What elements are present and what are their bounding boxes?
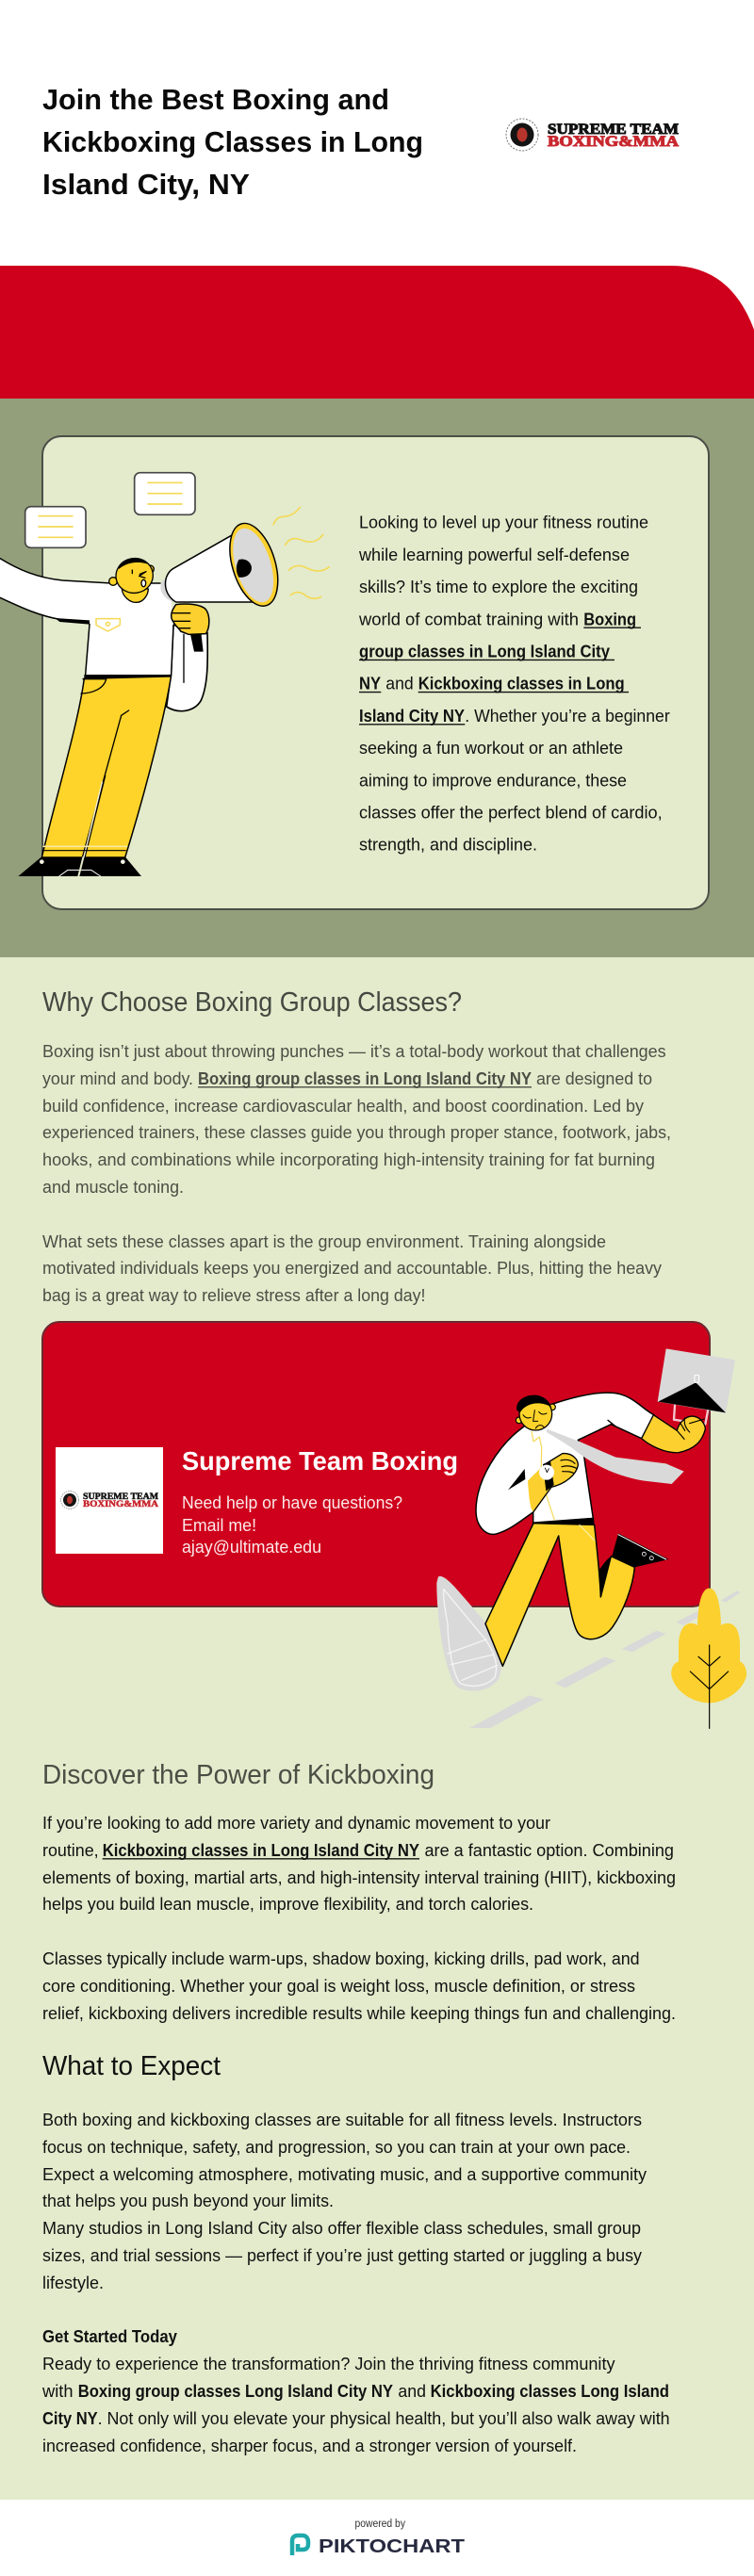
intro text block: skills? It’s time to explore the exciting: [359, 578, 638, 596]
text block: get started today: with: [41, 2382, 74, 2401]
intro text block: Boxing: [583, 610, 636, 628]
text block: kickboxing: Classes typically include warm-ups, shadow boxing, kicking drills, pad work, and: [42, 1949, 640, 1968]
text block: why choose: hooks, and combinations while incorporating high-intensity training for fat burning: [42, 1150, 655, 1169]
illustration: man with megaphone: [0, 473, 329, 876]
text block: kickboxing: elements of boxing, martial arts, and high-intensity interval training (HIIT), kickboxing: [42, 1868, 676, 1887]
title: Join the Best Boxing and: [42, 83, 389, 116]
logo: Supreme Team Boxing & MMA: BOXING&MMA: [548, 134, 680, 150]
text block: get started today: . Not only will you elevate your physical health, but you’ll also walk away with: [98, 2409, 670, 2428]
back shoe: [612, 1533, 668, 1567]
intro text block: [358, 514, 670, 855]
contact details: Email me!: [182, 1516, 256, 1535]
red banner with rounded corner: [0, 266, 754, 399]
logo: Supreme Team Boxing & MMA: [506, 119, 680, 151]
text block: what to expect: sizes, and trial sessions — perfect if you’re just getting started or juggling a busy: [42, 2246, 642, 2265]
text block: get started today: and: [398, 2382, 426, 2401]
intro text block: strength, and discipline.: [359, 836, 537, 855]
text block: why choose: motivated individuals keeps you energized and accountable. Plus, hitting the heavy: [42, 1259, 662, 1278]
icon: speech bubble top: [135, 473, 195, 514]
text block: why choose: bag is a great way to relieve stress after a long day!: [42, 1286, 426, 1305]
far sleeve: [167, 625, 207, 711]
text block: get started today: Get Started Today: [42, 2327, 177, 2346]
heading: why choose: Why Choose Boxing Group Classes?: [42, 987, 462, 1018]
head: [516, 1395, 555, 1430]
text block: get started today: Ready to experience the transformation? Join the thriving fitness community: [42, 2355, 615, 2373]
tree: [671, 1589, 746, 1728]
contact details: ajay@ultimate.edu: [182, 1538, 321, 1557]
intro text block: . Whether you’re a beginner: [465, 707, 670, 726]
sound waves: [273, 507, 329, 598]
text block: kickboxing: routine,: [42, 1841, 99, 1860]
intro text block: aiming to improve endurance, these: [359, 771, 627, 790]
text block: what to expect: focus on technique, safety, and progression, so you can train at your own pace.: [42, 2138, 631, 2157]
trousers: [485, 1524, 634, 1666]
contact details: Need help or have questions?: [182, 1493, 402, 1512]
intro text block: world of combat training with: [358, 610, 579, 628]
intro text block: Kickboxing classes in Long: [418, 675, 625, 693]
footer: [0, 2500, 754, 2576]
head: [109, 556, 156, 602]
road dashes: [469, 1590, 741, 1728]
briefcase: [658, 1348, 735, 1427]
text block: what to expect: Both boxing and kickboxing classes are suitable for all fitness levels. Instructors: [42, 2111, 642, 2129]
necktie: [547, 1429, 684, 1484]
text block: why choose: Boxing isn’t just about throwing punches — it’s a total-body workout that challenges: [42, 1042, 666, 1061]
shoes: [18, 857, 141, 876]
text block: why choose: What sets these classes apart is the group environment. Training alongside: [42, 1232, 606, 1251]
text block: kickboxing: Kickboxing classes in Long Island City NY: [103, 1841, 419, 1860]
text block: get started today: Kickboxing classes Long Island: [431, 2382, 669, 2401]
handle and hand: [172, 604, 209, 652]
intro text block: and: [385, 675, 414, 693]
text block: what to expect: that helps you push beyond your limits.: [42, 2192, 334, 2210]
intro text block: Island City NY: [359, 707, 465, 726]
intro text block: NY: [359, 675, 381, 693]
logo: Supreme Team Boxing & MMA: SUPREME TEAM: [548, 122, 679, 138]
title: Kickboxing Classes in Long: [42, 125, 423, 158]
intro text block: group classes in Long Island City: [359, 643, 610, 661]
title: Island City, NY: [42, 168, 250, 201]
text block: get started today: Boxing group classes Long Island City NY: [78, 2382, 393, 2401]
panel: contact card: [42, 1322, 710, 1606]
text block: kickboxing: relief, kickboxing delivers incredible results while keeping things fun and challenging.: [42, 2004, 676, 2023]
text block: kickboxing: are a fantastic option. Combining: [424, 1841, 674, 1860]
contact name: Supreme Team Boxing: [182, 1446, 458, 1475]
icon: piktochart mark: [292, 2535, 308, 2555]
contact details: [182, 1493, 402, 1557]
text block: kickboxing: core conditioning. Whether your goal is weight loss, muscle definition, or stress: [42, 1977, 635, 1996]
intro text block: classes offer the perfect blend of cardio,: [359, 803, 663, 822]
text block: get started today: [41, 2327, 670, 2455]
text block: why choose: Boxing group classes in Long Island City NY: [198, 1069, 532, 1088]
panel: intro band: [0, 399, 754, 957]
trousers: [41, 675, 172, 876]
text block: why choose: are designed to: [536, 1069, 652, 1088]
text block: why choose: [42, 1042, 671, 1305]
logo box: SUPREME TEAM: [83, 1492, 158, 1502]
shirt pocket: [96, 619, 120, 631]
logo box: BOXING&MMA: [83, 1500, 158, 1509]
intro text block: seeking a fun workout or an athlete: [359, 739, 623, 758]
piktochart wordmark: PIKTOCHART: [319, 2535, 466, 2557]
illustration: running man with briefcase and tree: [436, 1348, 746, 1728]
intro text block: while learning powerful self-defense: [358, 546, 630, 564]
text block: what to expect: Expect a welcoming atmosphere, motivating music, and a supportive community: [42, 2165, 647, 2184]
text block: kickboxing: If you’re looking to add more variety and dynamic movement to your: [42, 1814, 550, 1833]
text block: what to expect: Many studios in Long Island City also offer flexible class schedules, small group: [42, 2219, 641, 2238]
text block: why choose: experienced trainers, these classes guide you through proper stance, footwork, jabs,: [42, 1123, 671, 1142]
heading: what to expect: What to Expect: [42, 2051, 221, 2081]
shirt and outstretched arm: [0, 559, 173, 675]
text block: get started today: City NY: [42, 2409, 98, 2428]
text block: what to expect: [42, 2111, 647, 2292]
megaphone: [160, 517, 287, 611]
shirt with sleeves: [476, 1393, 654, 1534]
title: [42, 83, 423, 201]
text block: why choose: and muscle toning.: [42, 1178, 184, 1197]
text block: kickboxing: helps you build lean muscle, improve flexibility, and torch calories.: [42, 1895, 533, 1914]
icon: speech bubble left: [25, 507, 86, 547]
header panel: [0, 0, 754, 399]
text block: why choose: your mind and body.: [42, 1069, 193, 1088]
heading: discover: Discover the Power of Kickboxing: [42, 1760, 434, 1790]
forearm and watch: [508, 1454, 578, 1512]
intro text block: Looking to level up your fitness routine: [359, 514, 648, 532]
text block: get started today: increased confidence, sharper focus, and a stronger version of yourself.: [42, 2437, 577, 2455]
text block: kickboxing: [42, 1814, 676, 2023]
front shoe: [436, 1576, 501, 1691]
raised forearm and hand: [642, 1415, 705, 1453]
text block: what to expect: lifestyle.: [42, 2274, 104, 2292]
powered by label: powered by: [354, 2519, 405, 2530]
intro card: [42, 436, 709, 909]
text block: why choose: build confidence, increase cardiovascular health, and boost coordination. Led by: [42, 1097, 644, 1116]
logo box: [56, 1447, 163, 1554]
